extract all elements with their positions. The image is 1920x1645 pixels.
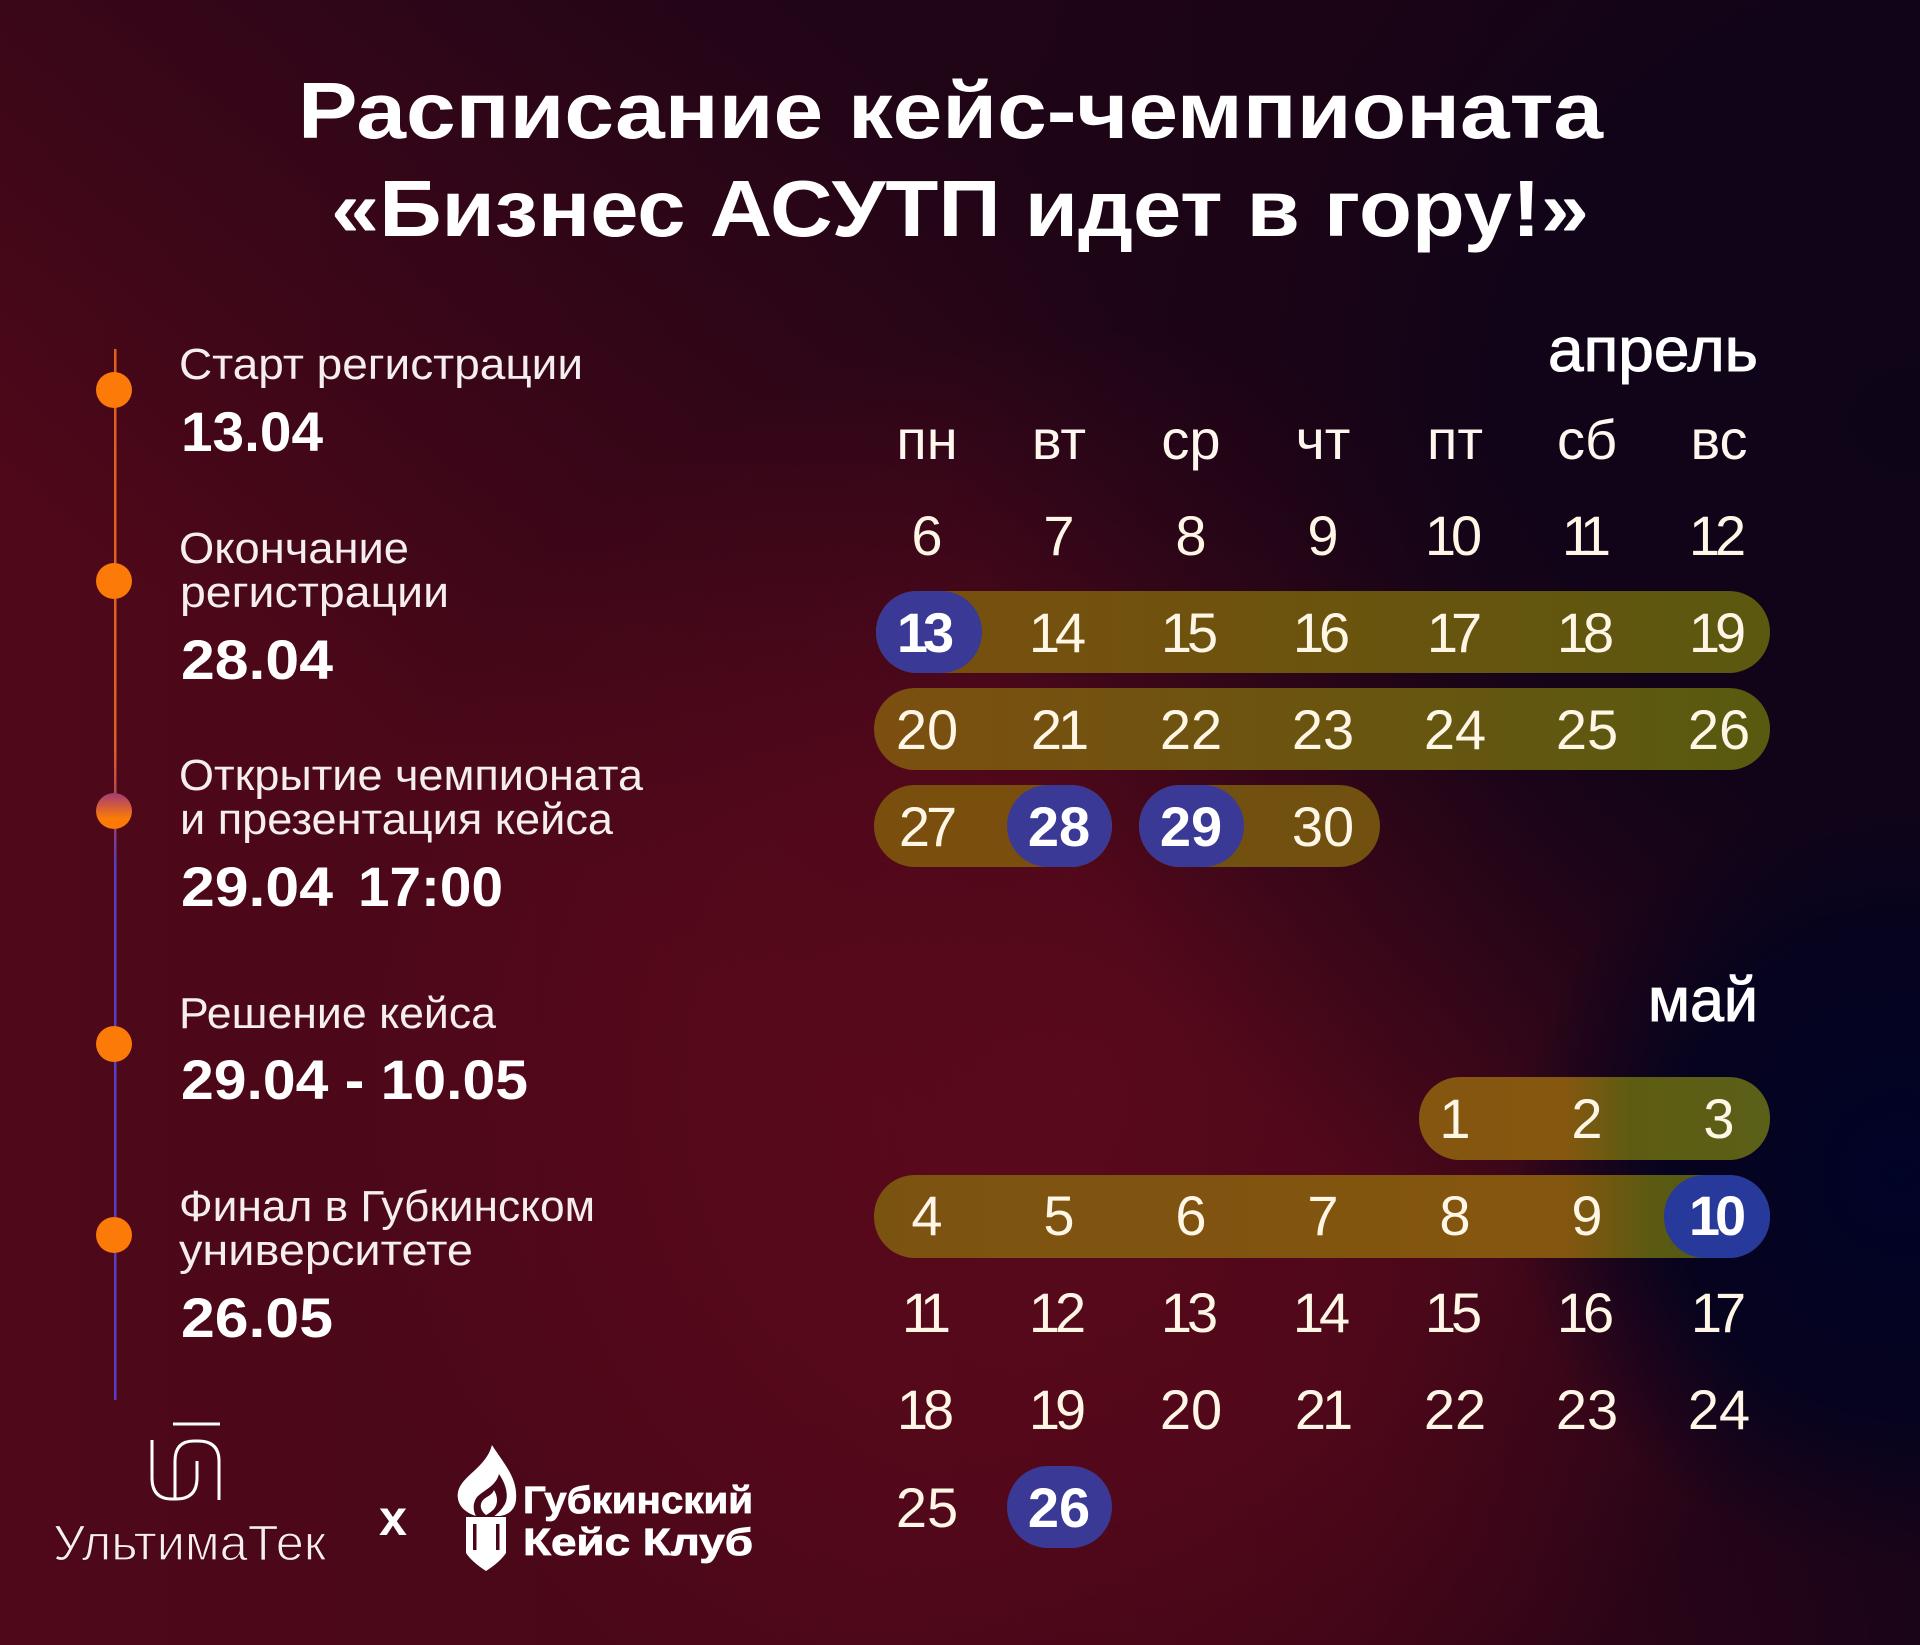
week 13-19: 19 — [1689, 601, 1744, 664]
timeline — [96, 349, 132, 1400]
weekday header: сб — [1557, 408, 1617, 471]
icon: torch — [458, 1445, 516, 1571]
week 13-19: 16 — [1293, 601, 1348, 664]
week 4-10: 5 — [1043, 1184, 1075, 1247]
calendar: april — [874, 316, 1770, 867]
week 6-12: 9 — [1307, 504, 1339, 567]
week 11-17: 16 — [1557, 1281, 1612, 1344]
week 20-26: 25 — [1556, 698, 1618, 761]
week 18-24: 22 — [1424, 1378, 1486, 1441]
week 6-12 — [911, 504, 1744, 567]
week 18-24: 21 — [1295, 1378, 1351, 1441]
week 6-12: 12 — [1689, 504, 1744, 567]
week 6-12: 8 — [1175, 504, 1207, 567]
event: final — [179, 1182, 595, 1349]
week 13-19 — [876, 591, 1770, 673]
month heading: april: апрель — [1548, 316, 1758, 385]
weekday header — [896, 408, 1748, 471]
event: registration start: 13.04 — [181, 400, 323, 463]
week 18-24: 23 — [1556, 1378, 1618, 1441]
week 11-17 — [902, 1281, 1744, 1344]
week 18-24: 19 — [1029, 1378, 1084, 1441]
week 27-30: 27 — [899, 795, 955, 858]
week 1-3: 1 — [1439, 1087, 1471, 1150]
weekday header: пн — [896, 408, 958, 471]
week 18-24 — [897, 1378, 1750, 1441]
logo: UltimaTech — [53, 1424, 327, 1571]
title: «Бизнес АСУТП идет в гору!» — [331, 164, 1589, 253]
week 18-24: 20 — [1160, 1378, 1222, 1441]
week 4-10: 6 — [1175, 1184, 1207, 1247]
event: registration end: 28.04 — [181, 628, 333, 691]
week 25-26: 26 — [1028, 1476, 1090, 1539]
week 13-19: 18 — [1557, 601, 1612, 664]
week 1-3 — [1419, 1077, 1770, 1160]
week 27-30: 28 — [1028, 795, 1090, 858]
event: registration end: регистрации — [180, 568, 449, 617]
weekday header: вс — [1690, 408, 1748, 471]
event: registration end — [179, 524, 449, 691]
dot: final — [96, 1217, 132, 1253]
week 11-17: 13 — [1161, 1281, 1216, 1344]
week 13-19: 14 — [1029, 601, 1085, 664]
event: registration start: Старт регистрации — [179, 340, 583, 389]
week 11-17: 14 — [1293, 1281, 1349, 1344]
event: registration start — [179, 340, 583, 463]
week 27-30 — [874, 785, 1380, 867]
logo: Gubkin Case Club — [458, 1445, 753, 1571]
week 1-3: 3 — [1703, 1087, 1735, 1150]
week 20-26: 26 — [1688, 698, 1750, 761]
week 11-17: 11 — [902, 1281, 949, 1344]
week 4-10: 4 — [911, 1184, 943, 1247]
event: opening: 29.04 — [181, 855, 333, 918]
event: opening: Открытие чемпионата — [179, 751, 644, 800]
week 25-26 — [896, 1466, 1112, 1548]
week 11-17: 12 — [1029, 1281, 1084, 1344]
week 20-26: 21 — [1031, 698, 1087, 761]
week 11-17: 17 — [1691, 1281, 1744, 1344]
dot: registration start — [96, 372, 132, 408]
event: final: университете — [179, 1226, 473, 1275]
event: opening — [179, 751, 644, 918]
week 1-3: 2 — [1571, 1087, 1603, 1150]
title: Расписание кейс-чемпионата — [298, 66, 1604, 155]
week 6-12: 11 — [1562, 504, 1609, 567]
event: opening: и презентация кейса — [180, 795, 614, 844]
dot: registration end — [96, 563, 132, 599]
icon: UltimaTech mark — [152, 1424, 220, 1500]
weekday header: чт — [1296, 408, 1350, 471]
week 27-30: 29 — [1160, 795, 1222, 858]
week 27-30: 30 — [1292, 795, 1354, 858]
week 6-12: 7 — [1043, 504, 1075, 567]
event: opening: 17:00 — [358, 855, 503, 918]
wordmark: УльтимаТек — [53, 1515, 327, 1571]
week 13-19: 15 — [1161, 601, 1216, 664]
event: case solving: Решение кейса — [179, 989, 497, 1038]
week 6-12: 6 — [911, 504, 943, 567]
event: case solving — [179, 989, 528, 1111]
timeline line — [114, 349, 116, 1400]
event: final: Финал в Губкинском — [179, 1182, 595, 1231]
weekday header: вт — [1032, 408, 1086, 471]
week 18-24: 18 — [897, 1378, 952, 1441]
week 13-19: 13 — [897, 601, 953, 664]
week 4-10: 10 — [1689, 1184, 1744, 1247]
calendar: may — [874, 966, 1770, 1548]
dot: opening — [96, 793, 132, 829]
event: final: 26.05 — [181, 1286, 333, 1349]
dot: case solving — [96, 1026, 132, 1062]
week 20-26: 23 — [1292, 698, 1354, 761]
event: case solving: 29.04 - 10.05 — [181, 1048, 528, 1111]
month heading: may: май — [1648, 966, 1758, 1035]
week 6-12: 10 — [1425, 504, 1480, 567]
weekday header: пт — [1427, 408, 1483, 471]
wordmark: Губкинский — [523, 1480, 753, 1522]
weekday header: ср — [1161, 408, 1221, 471]
week 25-26: 25 — [896, 1476, 958, 1539]
week 20-26: 20 — [896, 698, 958, 761]
week 11-17: 15 — [1425, 1281, 1480, 1344]
week 4-10 — [874, 1175, 1770, 1258]
week 20-26: 24 — [1424, 698, 1486, 761]
week 18-24: 24 — [1688, 1378, 1750, 1441]
collaboration x: х — [379, 1490, 407, 1546]
week 4-10: 8 — [1439, 1184, 1471, 1247]
title — [298, 66, 1604, 253]
week 4-10: 9 — [1571, 1184, 1603, 1247]
week 13-19: 17 — [1427, 601, 1480, 664]
logo: Gubkin Case Club: Кейс Клуб — [523, 1522, 753, 1564]
week 20-26: 22 — [1160, 698, 1222, 761]
week 20-26 — [874, 688, 1770, 770]
event: registration end: Окончание — [179, 524, 409, 573]
week 4-10: 7 — [1307, 1184, 1339, 1247]
